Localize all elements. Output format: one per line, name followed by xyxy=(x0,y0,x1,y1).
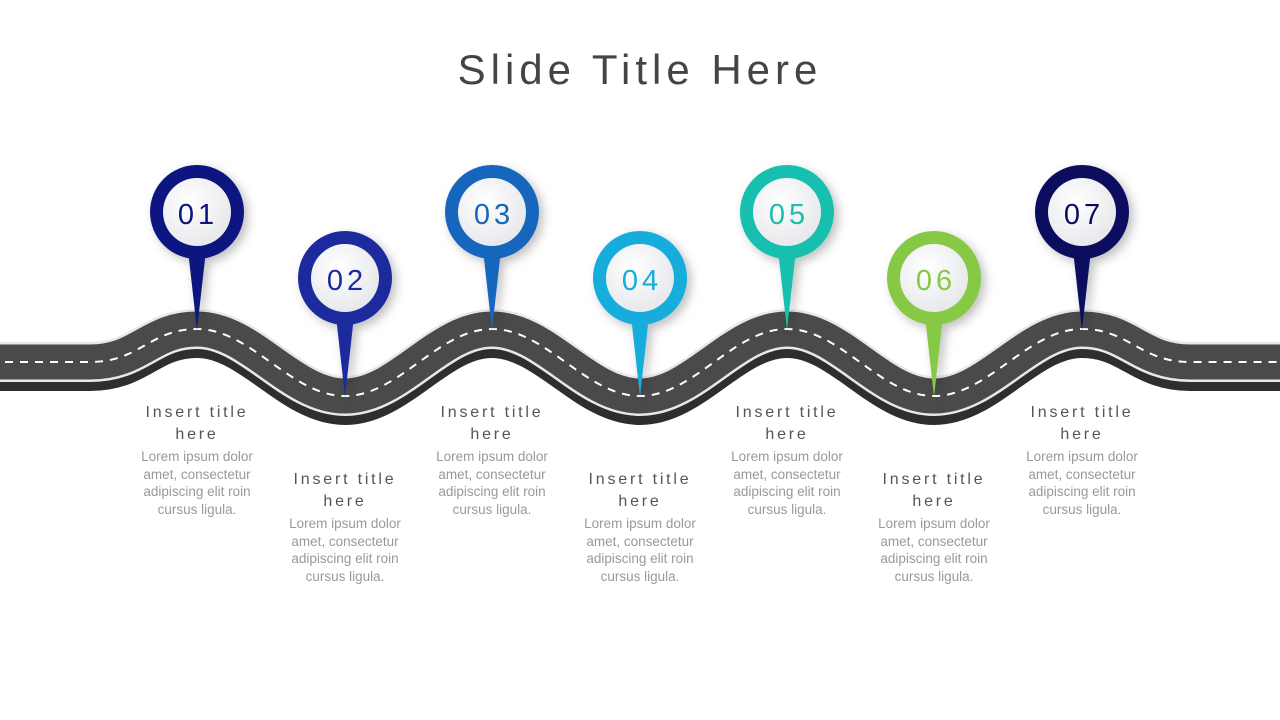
text 04: here xyxy=(618,493,662,510)
text 06: cursus ligula. xyxy=(895,568,973,584)
text 05: Lorem ipsum dolor xyxy=(731,449,843,464)
text 03: Lorem ipsum dolor xyxy=(436,449,548,464)
text 01 xyxy=(141,404,253,517)
text 04: Insert title xyxy=(589,471,691,488)
text 06: adipiscing elit roin xyxy=(880,551,988,566)
text 02 xyxy=(289,471,401,584)
text 05: adipiscing elit roin xyxy=(733,484,841,499)
pin 04 xyxy=(593,231,687,397)
pin 05: 05 xyxy=(769,199,809,231)
text 05: cursus ligula. xyxy=(748,502,826,516)
text 05 xyxy=(731,404,843,517)
text 07: Lorem ipsum dolor xyxy=(1026,449,1138,464)
text 02: cursus ligula. xyxy=(306,568,384,584)
text 05: Insert title xyxy=(736,404,838,421)
pin 05 xyxy=(740,165,834,330)
pin 02 xyxy=(298,231,392,397)
text 03: here xyxy=(470,426,514,443)
text 02: Insert title xyxy=(294,471,396,488)
pin 03: 03 xyxy=(474,199,514,231)
text 06: Lorem ipsum dolor xyxy=(878,516,990,531)
text 06: here xyxy=(912,493,956,510)
pin 01 xyxy=(150,165,244,330)
text 04: adipiscing elit roin xyxy=(586,551,694,566)
text 04: amet, consectetur xyxy=(586,534,694,548)
text 02: here xyxy=(323,493,367,510)
pin 07 xyxy=(1035,165,1129,330)
text 01: Insert title xyxy=(146,404,248,421)
text 06: Insert title xyxy=(883,471,985,488)
text 02: Lorem ipsum dolor xyxy=(289,516,401,531)
text 07: amet, consectetur xyxy=(1028,466,1136,482)
road xyxy=(0,329,1280,405)
text 01: amet, consectetur xyxy=(143,466,251,482)
text 03 xyxy=(436,404,548,517)
text 04 xyxy=(584,471,696,584)
text 03: Insert title xyxy=(441,404,543,421)
text 06 xyxy=(878,471,990,584)
text 04: cursus ligula. xyxy=(601,568,679,584)
pin 07: 07 xyxy=(1064,199,1104,231)
text 01: Lorem ipsum dolor xyxy=(141,449,253,464)
text 02: amet, consectetur xyxy=(291,534,399,548)
text 06: amet, consectetur xyxy=(880,534,988,548)
pin 04: 04 xyxy=(622,265,662,297)
text 01: here xyxy=(175,426,219,443)
text 07: Insert title xyxy=(1031,404,1133,421)
pin 02: 02 xyxy=(327,265,367,297)
text 07: adipiscing elit roin xyxy=(1028,484,1136,499)
pin 01: 01 xyxy=(178,199,218,231)
pin 06: 06 xyxy=(916,265,956,297)
text 05: here xyxy=(765,426,809,443)
text 07: here xyxy=(1060,426,1104,443)
text 01: cursus ligula. xyxy=(158,502,236,516)
text 03: cursus ligula. xyxy=(453,502,531,516)
text 05: amet, consectetur xyxy=(733,466,841,482)
text 03: amet, consectetur xyxy=(438,466,546,482)
title: Slide Title Here xyxy=(458,46,822,93)
text 07: cursus ligula. xyxy=(1043,502,1121,516)
text 07 xyxy=(1026,404,1138,517)
text 03: adipiscing elit roin xyxy=(438,484,546,499)
text 01: adipiscing elit roin xyxy=(143,484,251,499)
text 04: Lorem ipsum dolor xyxy=(584,516,696,531)
text 02: adipiscing elit roin xyxy=(291,551,399,566)
pin 03 xyxy=(445,165,539,330)
pin 06 xyxy=(887,231,981,397)
